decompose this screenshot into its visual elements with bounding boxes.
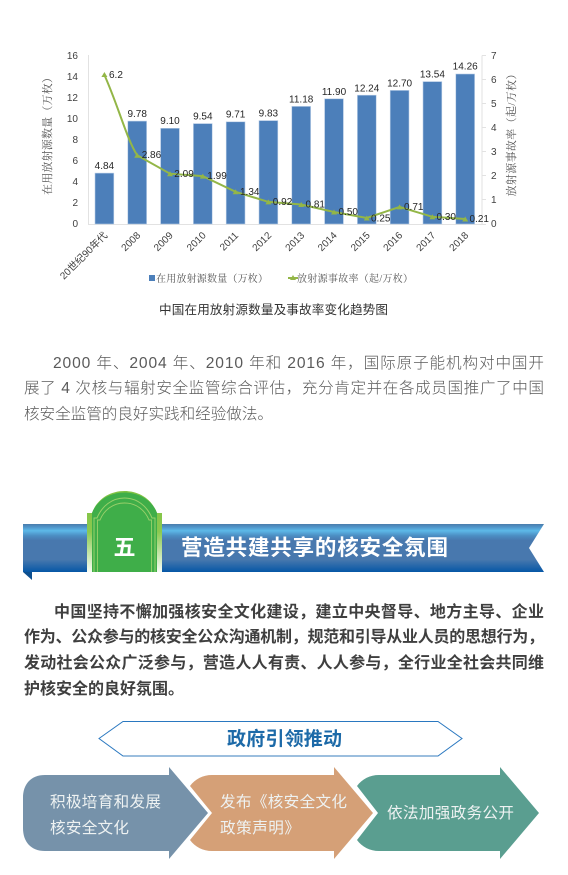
paragraph: nuclear safety culture: 作为、公众参与的核安全公众沟通机制，规范和引导从业人员的思想行为， bbox=[24, 627, 544, 646]
bar value labels: 9.78 bbox=[127, 109, 147, 120]
banner heading: 营造共建共享的核安全氛围 bbox=[181, 536, 448, 560]
category labels: 2010 bbox=[185, 230, 209, 254]
y axis left ticks: 4 bbox=[72, 177, 78, 188]
category labels: 2015 bbox=[349, 230, 373, 254]
accident rate labels: 1.99 bbox=[207, 171, 227, 182]
accident rate labels: 6.2 bbox=[109, 70, 123, 81]
y axis right ticks: 0 bbox=[491, 219, 497, 230]
bar value labels: 13.54 bbox=[420, 70, 445, 80]
bar value labels: 9.10 bbox=[160, 116, 180, 127]
arrow: cultivate culture: 核安全文化 bbox=[50, 819, 129, 837]
accident rate labels: 0.50 bbox=[338, 207, 358, 218]
arrow: policy statement bbox=[190, 767, 373, 859]
y axis left ticks: 12 bbox=[67, 93, 78, 104]
accident rate labels bbox=[109, 70, 489, 225]
heading box: government leadership bbox=[99, 722, 462, 756]
bar value labels: 11.18 bbox=[289, 94, 314, 106]
category labels: 2011 bbox=[218, 230, 241, 253]
paragraph: IAEA reviews bbox=[24, 354, 544, 423]
paragraph: nuclear safety culture: 发动社会公众广泛参与，营造人人有责、人人参与，全行业全社会共同维 bbox=[24, 653, 544, 672]
bar value labels: 9.71 bbox=[226, 110, 246, 120]
arrow: cultivate culture: 积极培育和发展 bbox=[50, 793, 161, 811]
accident rate labels: 0.92 bbox=[273, 197, 293, 208]
paragraph: nuclear safety culture: 护核安全的良好氛围。 bbox=[24, 679, 184, 698]
arrow: policy statement: 发布《核安全文化 bbox=[220, 793, 347, 811]
paragraph: nuclear safety culture bbox=[24, 602, 544, 698]
bar value labels: 12.24 bbox=[354, 84, 380, 94]
bar value labels: 9.83 bbox=[259, 108, 279, 120]
category labels: 2013 bbox=[284, 230, 307, 254]
arrow: open government: 依法加强政务公开 bbox=[387, 804, 514, 822]
category labels: 2014 bbox=[316, 230, 340, 254]
y axis left ticks: 8 bbox=[72, 135, 78, 146]
y axis right ticks: 4 bbox=[491, 123, 497, 134]
legend: 放射源事故率（起/万枚） bbox=[297, 272, 413, 285]
right axis title: 放射源事故率（起/万枚） bbox=[504, 68, 518, 196]
section header banner bbox=[23, 491, 544, 580]
y axis left ticks: 0 bbox=[72, 219, 78, 230]
bars bbox=[95, 74, 475, 224]
y axis right ticks: 7 bbox=[491, 51, 497, 62]
bar value labels: 11.90 bbox=[322, 87, 347, 98]
y axis left ticks bbox=[67, 51, 78, 230]
y axis left ticks: 10 bbox=[67, 114, 78, 125]
accident rate labels: 2.86 bbox=[142, 150, 162, 161]
category labels: 2016 bbox=[382, 230, 405, 254]
axis lines bbox=[88, 55, 486, 224]
paragraph: IAEA reviews: 核安全监管的良好实践和经验做法。 bbox=[24, 405, 273, 423]
arrow: open government bbox=[357, 767, 539, 859]
category labels bbox=[57, 229, 471, 282]
bar value labels: 12.70 bbox=[387, 78, 413, 90]
category labels: 2018 bbox=[448, 230, 471, 254]
accident rate labels: 0.30 bbox=[436, 212, 456, 223]
bar value labels: 4.84 bbox=[95, 161, 115, 172]
accident rate labels: 2.09 bbox=[174, 169, 194, 180]
category labels: 2009 bbox=[152, 230, 176, 254]
ribbon fold bbox=[23, 572, 32, 580]
accident rate line bbox=[101, 72, 468, 222]
chart: radioactive sources and accident rate bbox=[40, 51, 518, 285]
paragraph: nuclear safety culture: 中国坚持不懈加强核安全文化建设，建立中央督导、地方主导、企业 bbox=[54, 602, 544, 621]
y axis left ticks: 16 bbox=[67, 51, 78, 62]
accident rate labels: 1.34 bbox=[240, 187, 260, 198]
chart caption: 中国在用放射源数量及事故率变化趋势图 bbox=[159, 302, 388, 317]
left axis title: 在用放射源数量（万枚） bbox=[40, 72, 54, 195]
heading box: government leadership: 政府引领推动 bbox=[227, 727, 342, 750]
accident rate labels: 0.25 bbox=[371, 214, 391, 224]
legend bbox=[149, 272, 413, 285]
bar value labels bbox=[95, 62, 478, 172]
category labels: 20世纪90年代 bbox=[57, 229, 110, 282]
arrow: cultivate culture bbox=[23, 767, 208, 859]
paragraph: IAEA reviews: 展了 4 次核与辐射安全监管综合评估，充分肯定并在各成员国推广了中国 bbox=[24, 379, 544, 397]
category labels: 2008 bbox=[120, 230, 143, 254]
y axis right ticks: 6 bbox=[491, 75, 497, 86]
green arch badge bbox=[87, 491, 162, 572]
ribbon band bbox=[23, 524, 544, 572]
y axis left ticks: 14 bbox=[67, 72, 78, 83]
paragraph: IAEA reviews: 2000 年、2004 年、2010 年和 2016 年，国际原子能机构对中国开 bbox=[53, 354, 544, 372]
y axis left ticks: 6 bbox=[72, 156, 78, 167]
y axis right ticks: 5 bbox=[491, 99, 497, 110]
bar value labels: 9.54 bbox=[193, 112, 213, 122]
y axis right ticks: 2 bbox=[491, 171, 497, 182]
category labels: 2012 bbox=[251, 230, 274, 254]
accident rate labels: 0.81 bbox=[306, 200, 325, 210]
arrow: policy statement: 政策声明》 bbox=[220, 819, 300, 837]
y axis right ticks: 1 bbox=[491, 195, 497, 206]
legend: 在用放射源数量（万枚） bbox=[156, 272, 268, 285]
y axis left ticks: 2 bbox=[72, 198, 78, 209]
accident rate labels: 0.71 bbox=[404, 202, 424, 213]
y axis right ticks: 3 bbox=[491, 147, 497, 158]
category labels: 2017 bbox=[415, 230, 438, 254]
accident rate labels: 0.21 bbox=[470, 214, 489, 225]
y axis right ticks bbox=[491, 51, 497, 230]
bar value labels: 14.26 bbox=[453, 62, 478, 72]
badge numeral: 五 bbox=[113, 535, 136, 560]
